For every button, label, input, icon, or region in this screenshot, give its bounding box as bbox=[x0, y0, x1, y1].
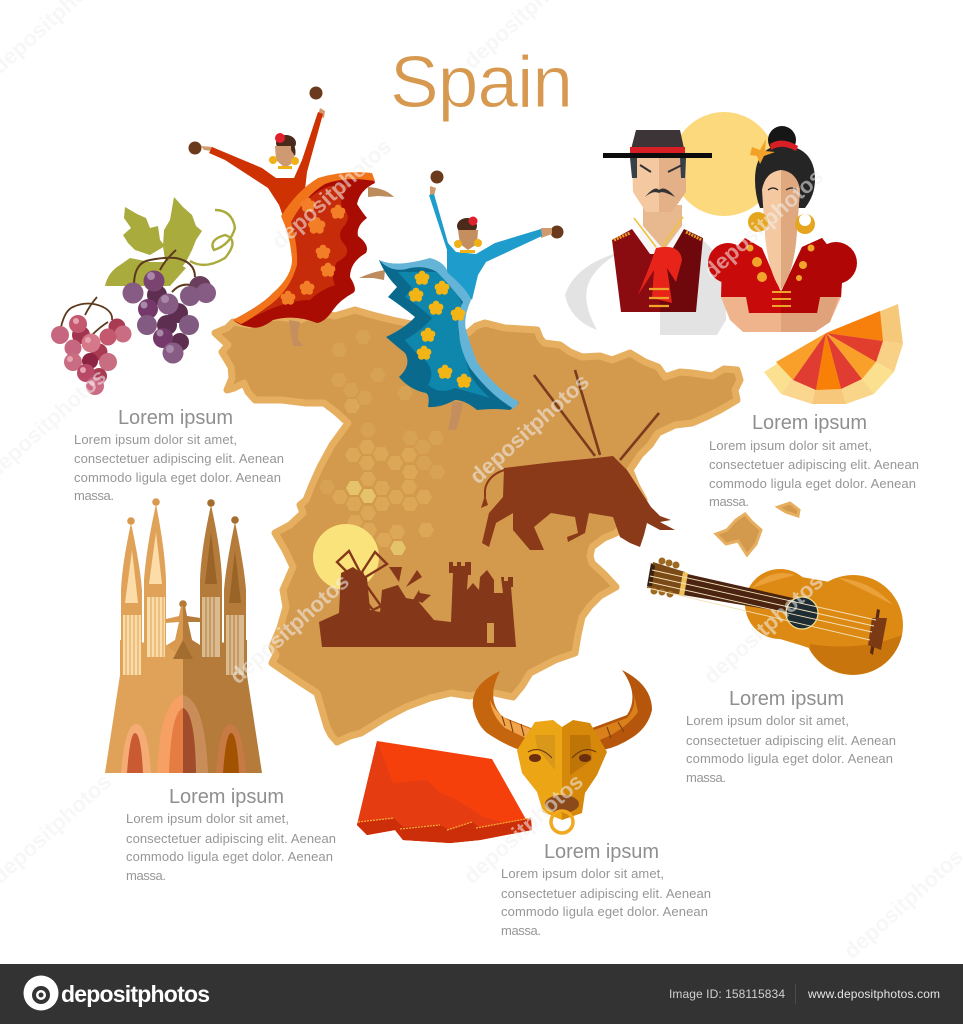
arms bbox=[721, 290, 841, 332]
text block: cathedral bbox=[126, 786, 336, 883]
hair and bun bbox=[768, 126, 796, 154]
face left half bbox=[517, 720, 562, 820]
castanets bbox=[188, 86, 322, 154]
text block: guitar: massa. bbox=[686, 770, 726, 785]
left outer spire bbox=[121, 517, 142, 675]
text block: grapes: massa. bbox=[74, 488, 114, 503]
puff sleeves bbox=[708, 243, 748, 283]
tendril bbox=[190, 210, 235, 265]
sun over windmills bbox=[313, 524, 379, 590]
text block: grapes: consectetuer adipiscing elit. Aenean bbox=[74, 451, 284, 466]
depositphotos camera logo bbox=[24, 976, 58, 1010]
watermarks: depositphotos bbox=[699, 569, 828, 689]
central spire bbox=[166, 600, 200, 660]
right inner spire bbox=[200, 499, 222, 660]
text block: bull: massa. bbox=[501, 923, 541, 938]
arches bbox=[157, 695, 183, 773]
brows and eyes bbox=[528, 750, 596, 758]
sound hole bbox=[786, 597, 818, 629]
folding fan bbox=[764, 304, 903, 404]
torso and arms bbox=[209, 112, 323, 222]
watermarks: depositphotos bbox=[465, 369, 594, 489]
balearic islands bbox=[716, 503, 799, 555]
watermarks: depositphotos bbox=[459, 769, 588, 889]
woman with bun bbox=[708, 126, 857, 332]
vine leaves bbox=[105, 197, 202, 286]
bridge bbox=[870, 609, 880, 655]
face right half bbox=[562, 720, 607, 820]
face and neck bbox=[762, 170, 800, 290]
text block: cathedral: massa. bbox=[126, 868, 166, 883]
text block: couple: massa. bbox=[709, 494, 749, 509]
text block: bull: Lorem ipsum dolor sit amet, bbox=[501, 866, 664, 881]
text block: couple: consectetuer adipiscing elit. Aenean bbox=[709, 457, 919, 472]
raised leg bbox=[359, 270, 385, 280]
skirt layers bbox=[379, 260, 519, 410]
fan inner blades bbox=[826, 311, 883, 341]
right outer spire bbox=[224, 516, 246, 675]
hair and head bbox=[276, 135, 296, 151]
raised leg bbox=[368, 187, 394, 197]
grape bunch: purple with leaf bbox=[105, 197, 235, 364]
text block: cathedral: Lorem ipsum dolor sit amet, bbox=[126, 811, 289, 826]
image id: Image ID: 158115834 bbox=[669, 987, 785, 1001]
bull silhouette with banderillas bbox=[481, 370, 675, 550]
matador cape bbox=[357, 741, 532, 843]
red flamenco dancer bbox=[188, 86, 394, 346]
footer bar bbox=[0, 964, 963, 1024]
dress bbox=[721, 238, 843, 313]
text block: couple: Lorem ipsum dolor sit amet, bbox=[709, 438, 872, 453]
strings bbox=[648, 570, 876, 640]
text block: bull bbox=[501, 841, 711, 938]
text block: guitar: consectetuer adipiscing elit. Aenean bbox=[686, 733, 896, 748]
left inner spire bbox=[144, 498, 166, 660]
brand name: depositphotos bbox=[61, 981, 210, 1007]
orange flowers on skirt bbox=[281, 198, 345, 305]
standing leg bbox=[448, 402, 463, 430]
text block: grapes: Lorem ipsum dolor sit amet, bbox=[74, 432, 237, 447]
hat bbox=[630, 130, 685, 153]
Sagrada Familia cathedral bbox=[105, 498, 262, 773]
text block: couple bbox=[709, 412, 919, 509]
nose and ring bbox=[545, 795, 579, 813]
horns bbox=[473, 671, 536, 750]
text block: couple: commodo ligula eget dolor. Aenean bbox=[709, 476, 916, 491]
standing leg bbox=[289, 320, 304, 346]
fan outer ribs bbox=[826, 304, 903, 344]
honeycomb hexagons bbox=[319, 330, 445, 555]
map of Spain bbox=[215, 310, 799, 742]
bull head bbox=[473, 670, 652, 833]
dress ornaments and buttons bbox=[746, 244, 814, 282]
text block: guitar: commodo ligula eget dolor. Aenean bbox=[686, 751, 893, 766]
torso and arms bbox=[429, 194, 542, 300]
text block: cathedral: Lorem ipsum bbox=[169, 786, 284, 808]
hair and head bbox=[457, 218, 477, 234]
castanets bbox=[430, 170, 564, 238]
watermarks: depositphotos bbox=[267, 134, 396, 254]
text block: guitar: Lorem ipsum bbox=[729, 688, 844, 710]
red neck bow bbox=[638, 247, 682, 303]
text block: cathedral: consectetuer adipiscing elit. Aenean bbox=[126, 831, 336, 846]
yellow flowers on skirt bbox=[409, 271, 471, 388]
text block: guitar: Lorem ipsum dolor sit amet, bbox=[686, 713, 849, 728]
blue flamenco dancer bbox=[359, 170, 564, 430]
title: Spain bbox=[390, 42, 573, 123]
watermarks: depositphotos bbox=[699, 164, 828, 284]
text block: guitar bbox=[686, 688, 896, 785]
vest bbox=[612, 229, 660, 312]
text block: bull: Lorem ipsum bbox=[544, 841, 659, 863]
skirt layers bbox=[233, 173, 375, 328]
guitar body bbox=[745, 569, 815, 639]
text block: grapes: commodo ligula eget dolor. Aenean bbox=[74, 470, 281, 485]
text block: cathedral: commodo ligula eget dolor. Aenean bbox=[126, 849, 333, 864]
text block: bull: consectetuer adipiscing elit. Aenean bbox=[501, 886, 711, 901]
gold buttons bbox=[649, 289, 669, 306]
watermarks: depositphotos bbox=[225, 569, 354, 689]
yellow sun behind couple bbox=[672, 112, 776, 216]
windmills and castle silhouette bbox=[319, 551, 516, 647]
earrings bbox=[748, 212, 768, 232]
neck and face bbox=[643, 205, 682, 250]
text block: grapes bbox=[74, 407, 284, 503]
main body right bbox=[183, 640, 262, 773]
grape bunch: pink bbox=[51, 297, 132, 395]
text block: bull: commodo ligula eget dolor. Aenean bbox=[501, 904, 708, 919]
white shirt and grey crescent bbox=[565, 250, 625, 330]
guitar bbox=[647, 558, 903, 675]
text block: grapes: Lorem ipsum bbox=[118, 407, 233, 429]
man in Spanish hat bbox=[565, 130, 726, 335]
neck and head bbox=[683, 573, 793, 613]
text block: couple: Lorem ipsum bbox=[752, 412, 867, 434]
main body left bbox=[105, 640, 183, 773]
website: www.depositphotos.com bbox=[807, 987, 940, 1001]
